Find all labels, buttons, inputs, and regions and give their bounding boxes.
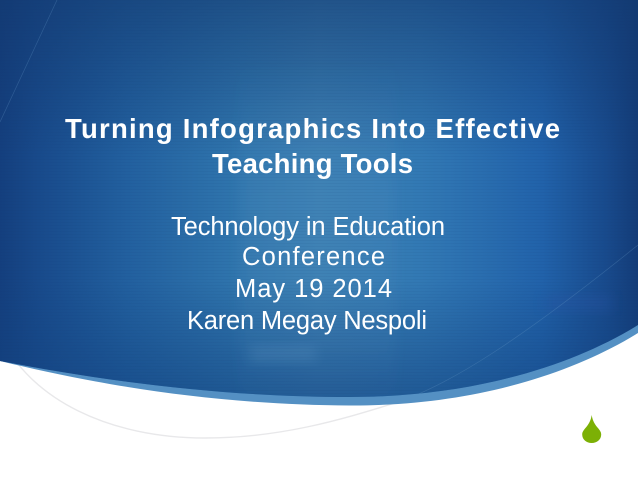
subtitle block: Conference bbox=[242, 243, 385, 271]
icon: green drop bbox=[582, 415, 601, 443]
subtitle block bbox=[171, 213, 445, 335]
subtitle block: Karen Megay Nespoli bbox=[187, 307, 427, 335]
subtitle block: May 19 2014 bbox=[235, 275, 392, 303]
title: Teaching Tools bbox=[212, 148, 413, 179]
light blue band under header bbox=[0, 300, 638, 406]
title bbox=[65, 113, 560, 179]
subtitle block: Technology in Education bbox=[171, 213, 445, 241]
decorative grey arc bbox=[0, 335, 395, 438]
title: Turning Infographics Into Effective bbox=[65, 113, 560, 144]
